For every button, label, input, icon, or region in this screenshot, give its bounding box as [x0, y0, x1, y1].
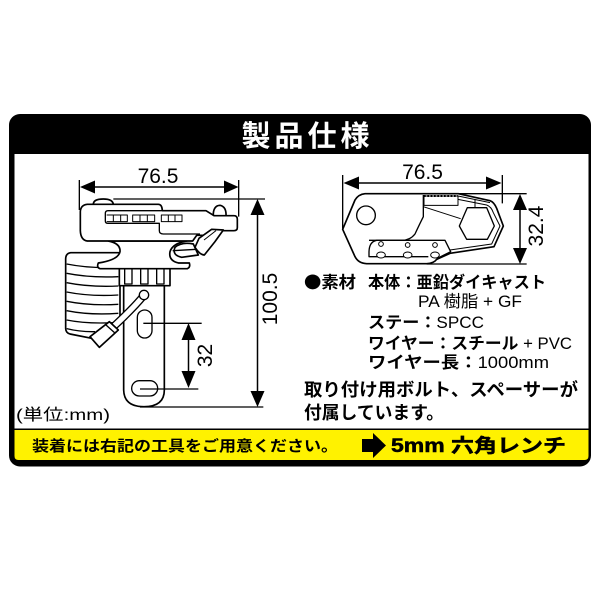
text block: materials — [304, 269, 572, 372]
icon: lock head — [80, 199, 237, 241]
body material line 2: PA 樹脂 + GF — [418, 292, 522, 311]
drawing: lock top view — [343, 175, 527, 264]
icon: mounting stay plate — [124, 285, 164, 407]
dimension: width 76.5: 76.5 — [138, 165, 178, 188]
icon: coiled wire — [66, 253, 120, 338]
stay material: ステー：SPCC — [368, 314, 484, 332]
icon: toothed collar — [119, 268, 170, 286]
dimension: height 100.5 — [250, 199, 282, 407]
footer tool name: 5mm 六角レンチ — [391, 435, 566, 457]
drawing: lock body, coil and stay — [66, 180, 265, 407]
icon: arrow — [362, 433, 386, 458]
icon: flange and neck — [98, 241, 198, 269]
dimension: width 76.5: 76.5 — [402, 161, 443, 184]
panel: product specifications frame — [9, 114, 591, 466]
dimension: hole spacing 32: 32 — [194, 344, 217, 367]
unit note: (単位:mm) — [16, 406, 110, 424]
body material: 本体：亜鉛ダイキャスト — [368, 272, 546, 292]
note line 1: 取り付け用ボルト、スペーサーが — [304, 379, 578, 400]
note line 2: 付属しています。 — [304, 403, 444, 423]
material label: ●素材 — [304, 269, 356, 293]
dimension: width 76.5 — [344, 161, 502, 190]
dimension: width 76.5 — [80, 165, 238, 194]
dimension: height 32.4 — [513, 194, 548, 264]
wire length: ワイヤー長： 1000mm — [368, 354, 549, 372]
icon: wire with plug — [90, 290, 149, 347]
dimension extension and centre lines — [79, 180, 265, 407]
dimension: hole spacing 32 — [182, 323, 217, 388]
footer note: 装着には右記の工具をご用意ください。 — [32, 437, 338, 455]
dimension: height 32.4: 32.4 — [525, 205, 548, 246]
dimension: height 100.5: 100.5 — [259, 273, 282, 325]
text block: included parts note — [304, 379, 578, 423]
diagram: side view of lock with dimensions — [66, 165, 282, 407]
diagram: top view of lock with dimensions — [343, 161, 548, 264]
wire material: ワイヤー：スチール + PVC — [368, 335, 572, 353]
icon: wire end fitting at head — [195, 229, 223, 255]
title: 製品仕様 — [241, 120, 374, 153]
